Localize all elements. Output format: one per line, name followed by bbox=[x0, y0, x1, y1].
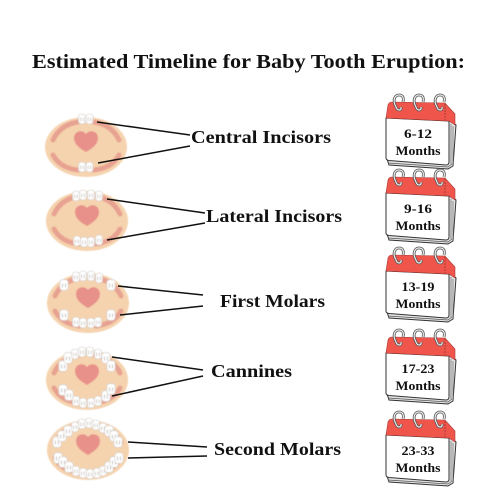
calendar: 6-12 months bbox=[386, 95, 456, 169]
calendar: 13-19 months bbox=[386, 248, 456, 322]
label: lateral incisors: Lateral Incisors bbox=[206, 206, 342, 226]
pointer lines: cannines bbox=[112, 357, 203, 396]
mouth: cannines bbox=[46, 347, 128, 410]
label: cannines: Cannines bbox=[211, 361, 292, 381]
label: central incisors: Central Incisors bbox=[191, 127, 331, 147]
pointer lines: second molars bbox=[128, 442, 207, 458]
mouth: second molars bbox=[47, 418, 129, 480]
row: cannines bbox=[46, 330, 456, 410]
mouth: lateral incisors bbox=[46, 190, 128, 251]
label: first molars: First Molars bbox=[220, 291, 325, 311]
calendar: 9-16 months: 9-16 bbox=[404, 202, 432, 216]
calendar: 13-19 months: Months bbox=[396, 297, 441, 311]
calendar: 9-16 months bbox=[386, 170, 456, 244]
calendar: 17-23 months bbox=[386, 330, 456, 404]
row: first molars bbox=[47, 248, 456, 333]
row: second molars bbox=[47, 412, 456, 486]
mouth: central incisors bbox=[45, 114, 127, 177]
calendar: 6-12 months: Months bbox=[396, 144, 441, 158]
title: Estimated Timeline for Baby Tooth Eruption: bbox=[32, 51, 465, 73]
label: second molars: Second Molars bbox=[214, 439, 341, 459]
calendar: 17-23 months: Months bbox=[396, 379, 441, 393]
pointer lines: lateral incisors bbox=[107, 199, 205, 240]
calendar: 23-33 months bbox=[386, 412, 456, 486]
calendar: 13-19 months: 13-19 bbox=[402, 280, 434, 294]
calendar: 9-16 months: Months bbox=[396, 219, 441, 233]
calendar: 23-33 months: Months bbox=[396, 461, 441, 475]
pointer lines: first molars bbox=[118, 286, 203, 315]
calendar: 23-33 months: 23-33 bbox=[402, 444, 434, 458]
mouth: first molars bbox=[47, 271, 129, 333]
pointer lines: central incisors bbox=[97, 122, 190, 163]
calendar: 6-12 months: 6-12 bbox=[404, 127, 432, 141]
calendar: 17-23 months: 17-23 bbox=[402, 362, 434, 376]
row: central incisors bbox=[45, 95, 456, 177]
row: lateral incisors bbox=[46, 170, 456, 251]
